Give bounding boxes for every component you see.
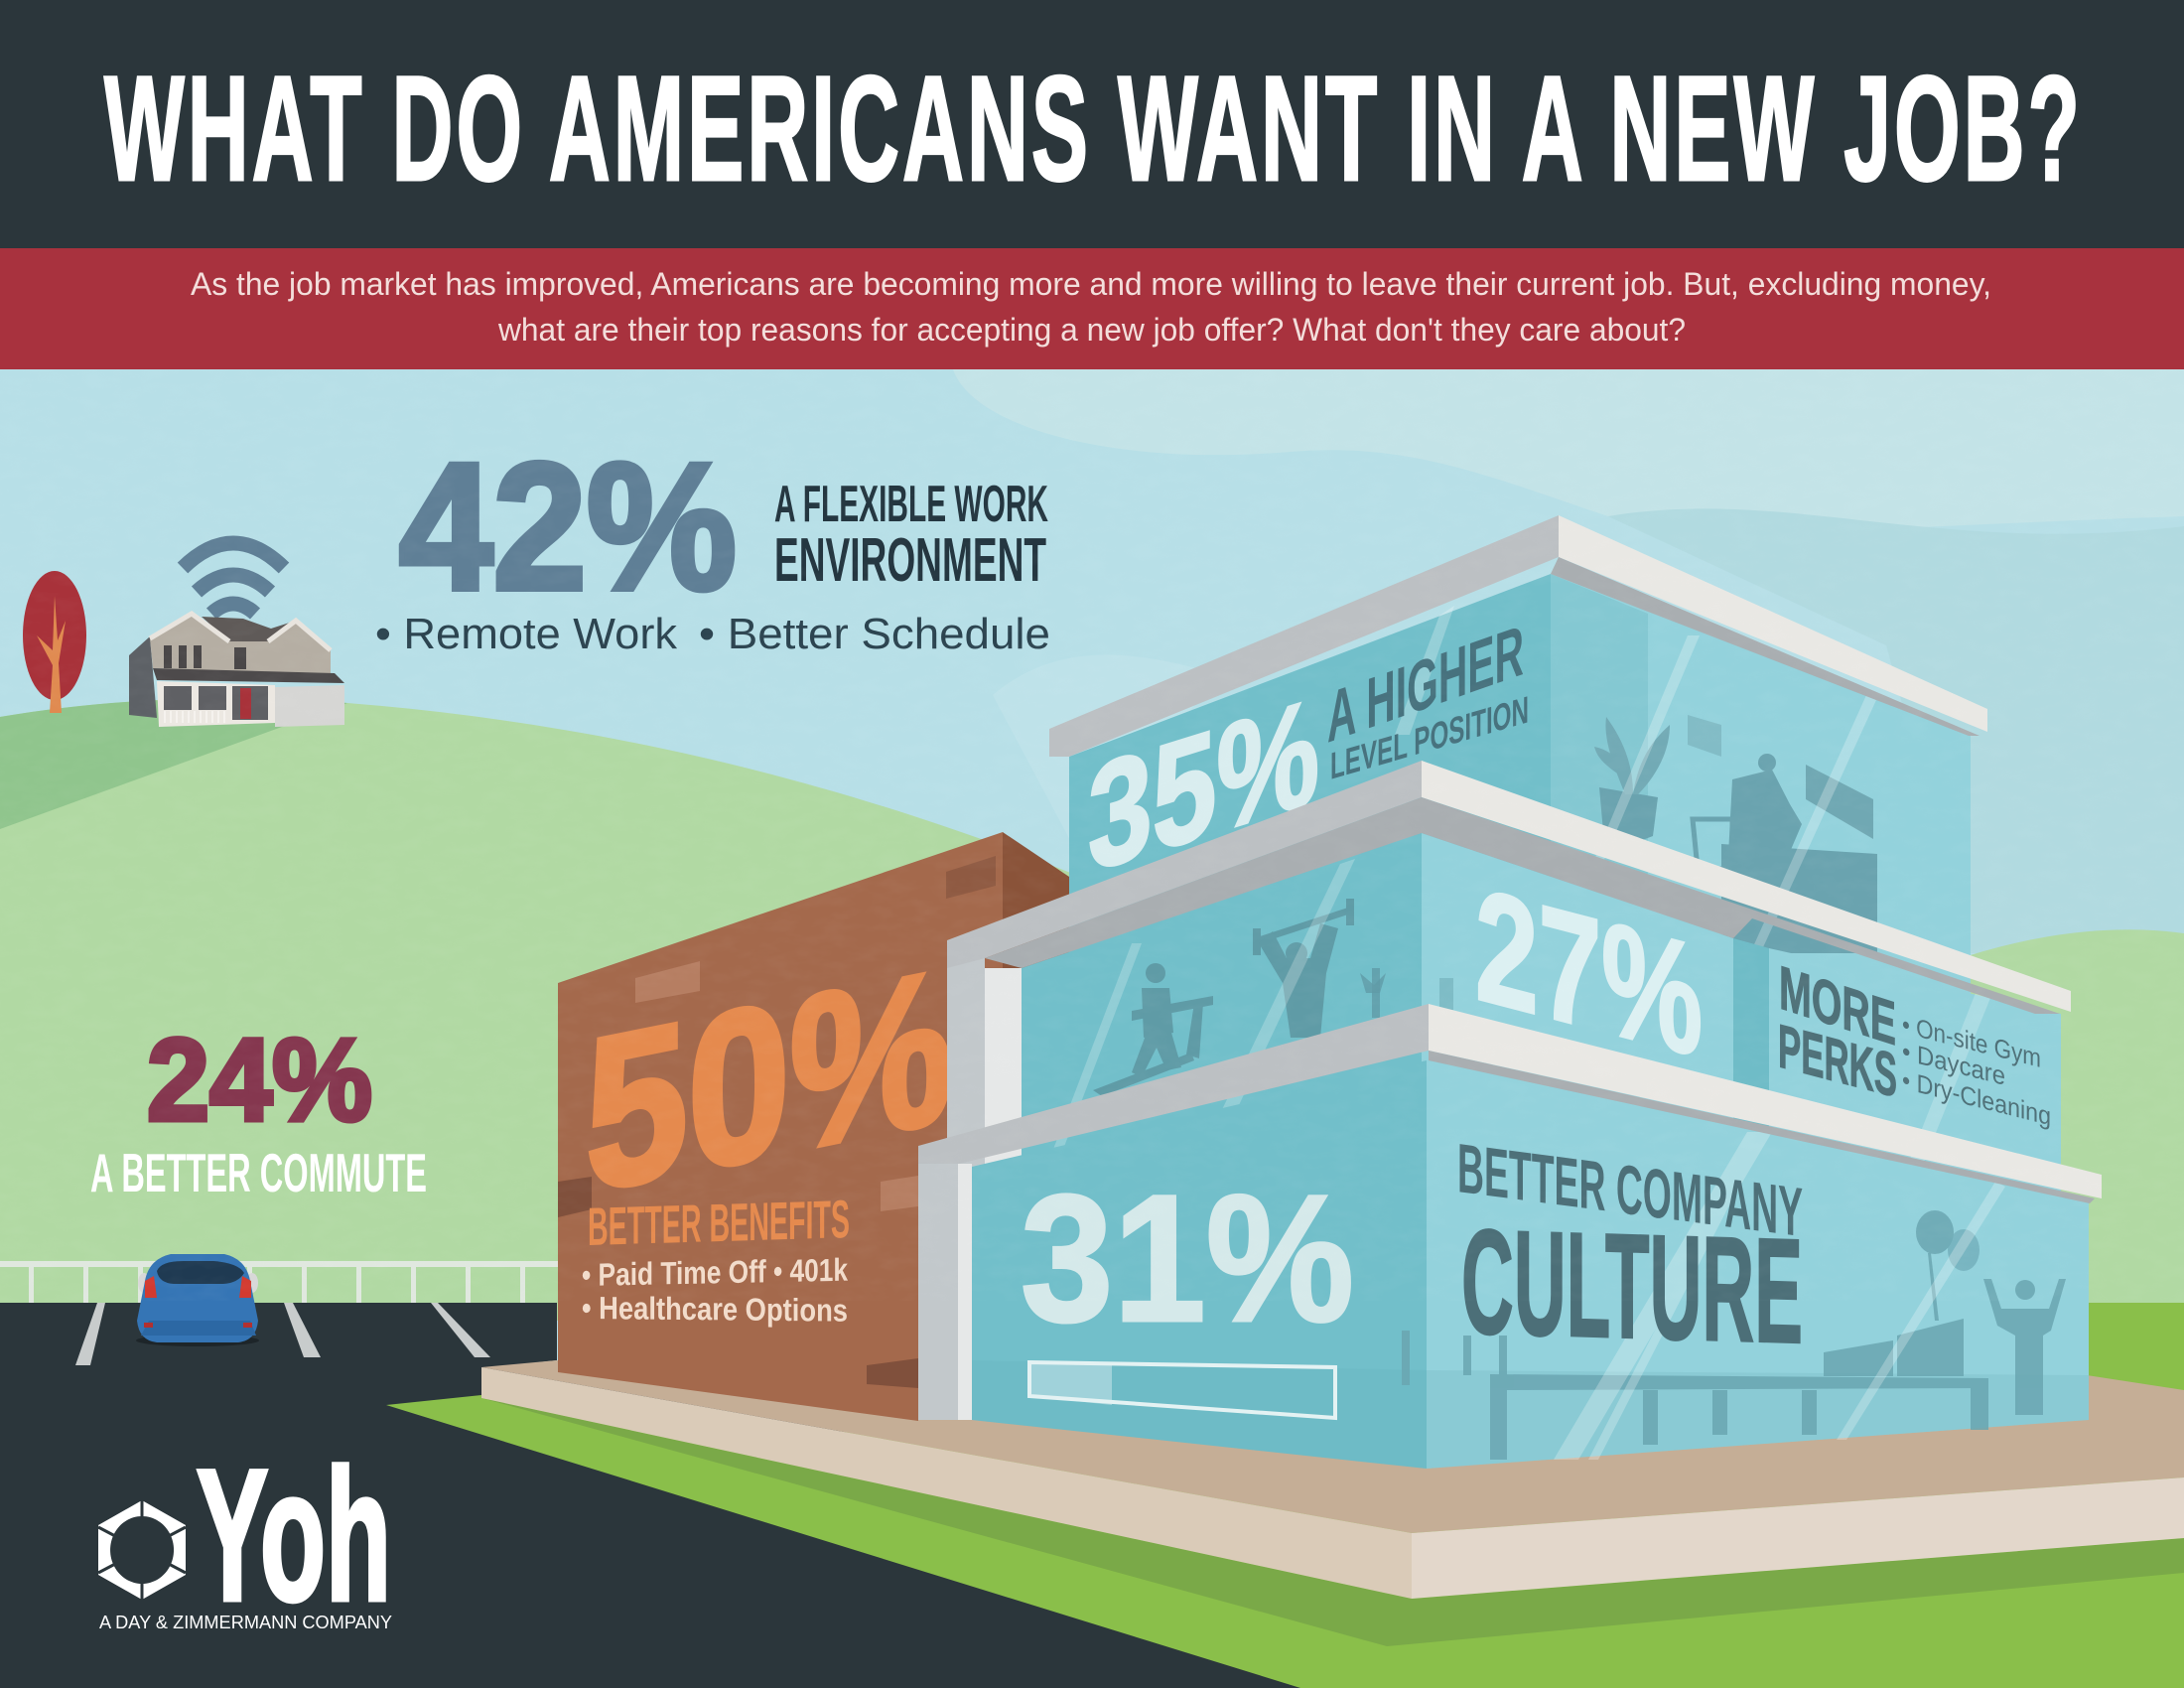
logo: Yoh: Yoh	[197, 1431, 391, 1639]
perks list: • Daycare	[1902, 1036, 2005, 1091]
plinth	[481, 1360, 2184, 1599]
fence	[0, 1261, 558, 1303]
roof: top floor	[1049, 515, 1987, 757]
white column	[918, 1146, 959, 1420]
logo: Yoh: A DAY & ZIMMERMANN COMPANY	[99, 1613, 392, 1632]
more perks label	[1778, 952, 1897, 1111]
stat: 24% better commute	[90, 1015, 427, 1203]
glass reflections	[1554, 1132, 2005, 1460]
glass reflections	[1395, 606, 1876, 993]
stat: 42% flexible work: • Remote Work	[375, 610, 678, 658]
50% figure: 50%	[586, 922, 953, 1238]
intro band: As the job market has improved, Americans are becoming more and more willing to leave their current job. But, excluding money,	[191, 266, 1991, 302]
logo: Yoh	[98, 1431, 392, 1639]
roof: middle floor	[947, 761, 2071, 1014]
stat: 24% better commute: 24%	[147, 1015, 372, 1146]
icon: wifi signal	[183, 543, 284, 614]
higher position label	[1327, 610, 1529, 788]
better company culture label	[1457, 1128, 1803, 1374]
stat: 42% flexible work	[375, 425, 1050, 658]
progress bar	[1029, 1362, 1335, 1418]
stat: 42% flexible work: ENVIRONMENT	[774, 526, 1046, 595]
gym silhouettes	[1093, 899, 1453, 1096]
panel: ground floor 31% better culture: CULTURE	[1461, 1197, 1803, 1374]
panel: box 50% better benefits	[558, 832, 1072, 1421]
perks list	[1902, 1009, 2051, 1131]
sky background	[0, 369, 2184, 1362]
27% figure: 27%	[1475, 855, 1703, 1091]
stat: 42% flexible work: A FLEXIBLE WORK	[774, 476, 1048, 533]
panel: middle floor 27% more perks	[947, 833, 2061, 1221]
parking lines	[75, 1303, 490, 1365]
35% figure: 35%	[1088, 665, 1319, 904]
more perks label: PERKS	[1778, 1012, 1897, 1111]
more perks label: MORE	[1779, 952, 1896, 1058]
higher position label: LEVEL POSITION	[1330, 689, 1529, 788]
office silhouettes	[1594, 715, 1877, 953]
icon: tree	[23, 571, 86, 713]
better company culture label: BETTER COMPANY	[1457, 1128, 1803, 1251]
grass shadow	[481, 1398, 2184, 1646]
icon: house	[129, 614, 344, 727]
benefits list: • Paid Time Off • 401k	[582, 1252, 848, 1293]
higher position label: A HIGHER	[1327, 610, 1524, 759]
stat: 42% flexible work: 42%	[399, 425, 737, 628]
road	[0, 1303, 1300, 1688]
right hill	[1946, 929, 2184, 1321]
white column	[947, 940, 985, 1192]
right grass	[386, 1303, 2184, 1688]
icon: car	[136, 1254, 259, 1346]
header bar	[0, 0, 2184, 248]
perks list: • Dry-Cleaning	[1902, 1064, 2051, 1131]
stat: 24% better commute: A BETTER COMMUTE	[90, 1142, 427, 1203]
title: WHAT DO AMERICANS WANT IN A NEW JOB?	[104, 45, 2080, 211]
benefits list: • Healthcare Options	[582, 1290, 848, 1329]
left hill	[0, 698, 1122, 1321]
intro band: what are their top reasons for accepting a new job offer? What don't they care about?	[497, 312, 1686, 348]
31% figure: 31%	[1021, 1157, 1354, 1359]
icon: hexagon mark	[98, 1497, 186, 1603]
glass reflections	[1052, 859, 1990, 1182]
office party silhouettes	[1402, 1210, 2066, 1460]
perks list: • On-site Gym	[1902, 1009, 2041, 1073]
intro band	[0, 248, 2184, 369]
panel: top floor 35% higher position	[1069, 574, 1971, 1142]
stat: 42% flexible work: • Better Schedule	[699, 610, 1050, 658]
better benefits label: BETTER BENEFITS	[588, 1190, 850, 1257]
benefits list	[582, 1252, 848, 1329]
roof: ground floor	[918, 1004, 2102, 1203]
panel: ground floor 31% better culture	[918, 1060, 2089, 1469]
